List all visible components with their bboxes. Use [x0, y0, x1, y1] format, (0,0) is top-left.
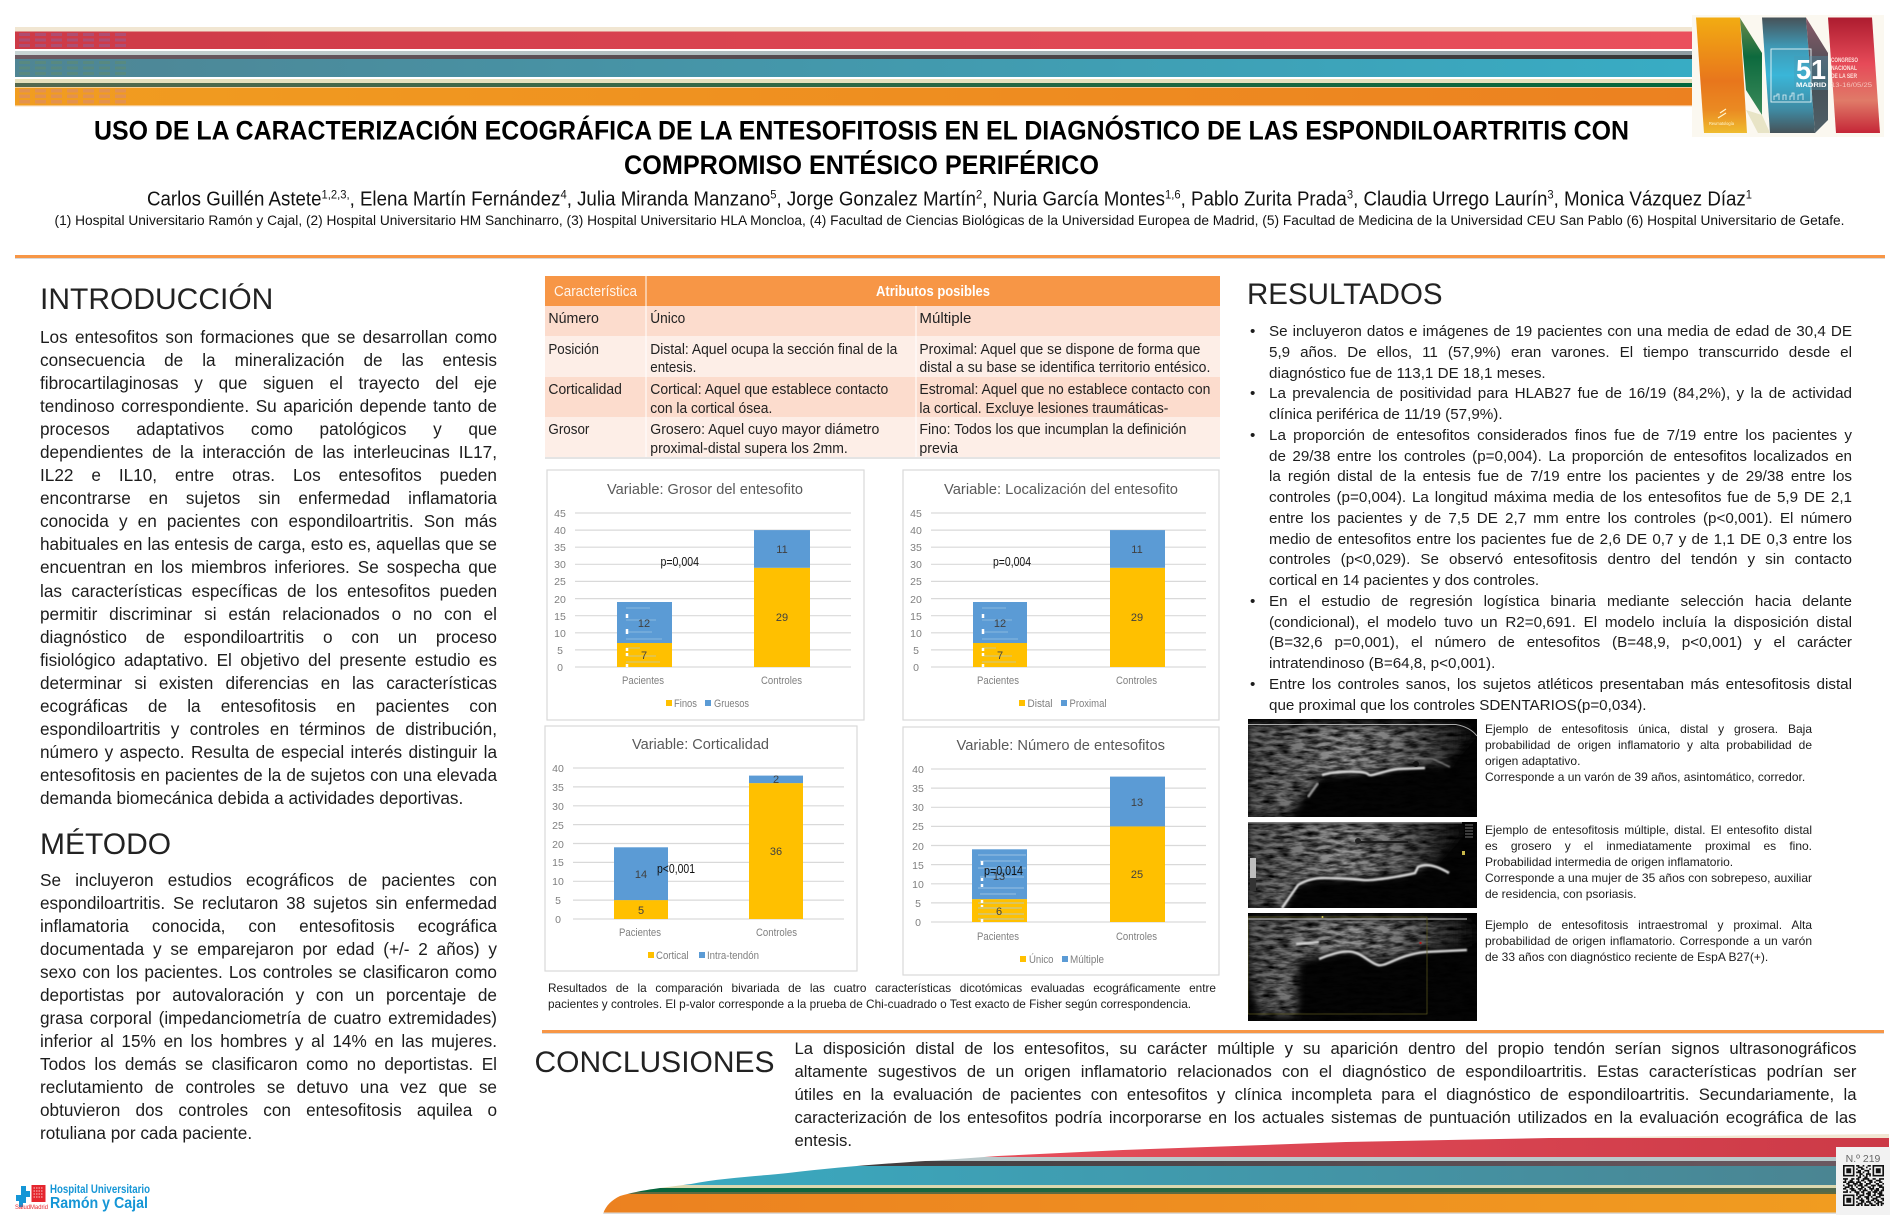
text: introducción: fibrocartilaginosas y que siguen el trayecto del eje	[40, 373, 497, 393]
table: características y atributos: Grosero: Aquel cuyo mayor diámetro	[650, 422, 879, 438]
chart: número de entesofitos: Único	[1029, 953, 1054, 966]
chart: corticalidad: 10	[552, 876, 564, 888]
chart: localización del entesofito: 45	[910, 508, 922, 520]
affiliations: (1) Hospital Universitario Ramón y Cajal, (2) Hospital Universitario HM Sanchinarro, (3) Hospital Universitario HLA Moncloa, (4) Facultad de Ciencias Biológicas de la Universidad Europea de Madrid, (5) Facultad de Medicina de la Universidad CEU San Pablo (6) Hospital Universitario de Getafe.	[54, 213, 1844, 228]
text: conclusiones: altamente sugestivos de un origen inflamatorio relacionados con el diagnóstico de espondiloartritis. Estas características podrían ser	[794, 1062, 1856, 1081]
authors: 5	[770, 188, 777, 202]
chart: localización del entesofito: 35	[910, 542, 922, 554]
chart: corticalidad: 20	[552, 839, 564, 851]
text: conclusiones: caracterización de los entesofitos podría incorporarse en los actuales sistemas de puntuación utilizados en la evaluación ecográfica de las	[794, 1108, 1856, 1127]
chart: localización del entesofito: Controles	[1116, 675, 1157, 687]
chart: corticalidad: 2	[773, 774, 779, 786]
chart: localización del entesofito: 25	[910, 576, 922, 588]
chart caption	[548, 981, 1216, 1011]
chart: localización del entesofito: 12	[994, 618, 1006, 630]
chart: localización del entesofito: 10	[910, 628, 922, 640]
chart: grosor del entesofito: 25	[554, 576, 566, 588]
text: conclusiones: La disposición distal de los entesofitos, su carácter múltiple y su aparición dentro del propio tendón serían signos ultrasonográficos	[794, 1038, 1856, 1058]
authors: Carlos Guillén Astete	[147, 188, 334, 210]
text: introducción: conocida y en pacientes con espondiloartritis. Son más	[40, 511, 497, 531]
text: introducción	[40, 327, 498, 808]
text: introducción: procesos adaptativos como patológicos y que	[40, 419, 497, 439]
chart: grosor del entesofito: 45	[554, 508, 566, 520]
authors: , Jorge Gonzalez Martín	[777, 188, 976, 210]
captions: ultrasound examples	[1485, 722, 1812, 964]
text: introducción: fisiológico adaptativo. El objetivo del presente estudio es	[40, 650, 497, 670]
chart: grosor del entesofito: Variable: Grosor del entesofito	[607, 481, 803, 498]
heading: introducción: INTRODUCCIÓN	[40, 283, 273, 316]
text: conclusiones: entesis.	[794, 1131, 852, 1150]
text: introducción: número y aspecto. Resulta de especial interés distinguir la	[40, 742, 497, 762]
chart: número de entesofitos: 25	[1131, 869, 1143, 881]
text: conclusiones	[794, 1038, 1857, 1150]
text: método: Todos los demás se clasificaron como no deportistas. El	[40, 1054, 497, 1074]
QR badge N.º 219	[1836, 1147, 1890, 1215]
text: resultados bullets: clínica periférica de 11/19 (57,9%).	[1269, 406, 1503, 423]
text: resultados bullets: la región distal de la entesis fue de 7/19 entre los pacientes y de 29/38 entre los	[1269, 468, 1852, 485]
chart: grosor del entesofito	[546, 470, 864, 720]
chart: número de entesofitos: 25	[912, 821, 924, 833]
chart: corticalidad: 0	[555, 914, 561, 926]
text: método: obtuvieron dos controles con entesofitosis aquilea o	[40, 1100, 497, 1120]
table: características y atributos: Número	[548, 311, 599, 327]
text: introducción: consecuencia de la mineralización de las entesis	[40, 350, 497, 370]
authors: , Monica Vázquez Díaz	[1554, 188, 1746, 210]
chart: localización del entesofito: Pacientes	[977, 675, 1019, 687]
chart: número de entesofitos: 13	[993, 871, 1005, 883]
chart: grosor del entesofito: 35	[554, 542, 566, 554]
authors: 4	[560, 188, 567, 202]
text: método: espondiloartritis. Se reclutaron 38 sujetos sin enfermedad	[40, 893, 497, 913]
title	[94, 116, 1629, 180]
chart: corticalidad: 40	[552, 763, 564, 775]
text: introducción: diagnóstico de espondiloartritis o con un proceso	[40, 627, 497, 647]
text: introducción: dependientes de la interacción de las interleucinas IL17,	[40, 442, 497, 462]
caption 1: Corresponde a un varón de 39 años, asintomático, corredor.	[1485, 770, 1805, 784]
table: características y atributos: Característica	[554, 284, 638, 300]
chart: número de entesofitos: Pacientes	[977, 931, 1019, 943]
logo: 51 Congreso Nacional de la SER	[1692, 15, 1884, 137]
chart: grosor del entesofito: 12	[638, 618, 650, 630]
chart: número de entesofitos: 20	[912, 841, 924, 853]
heading: conclusiones: CONCLUSIONES	[534, 1046, 775, 1078]
chart: localización del entesofito: p=0,004	[993, 555, 1031, 569]
chart: número de entesofitos: 5	[915, 898, 921, 910]
title: COMPROMISO ENTÉSICO PERIFÉRICO	[624, 150, 1099, 180]
top colour band	[15, 27, 1692, 107]
logo: 51 Congreso Nacional de la SER: 51	[1796, 54, 1826, 85]
table: características y atributos: Único	[650, 310, 685, 327]
panel: resultados: •	[1250, 593, 1255, 610]
chart: número de entesofitos: Múltiple	[1070, 954, 1104, 966]
caption 1	[1485, 722, 1812, 784]
text: resultados bullets: diagnóstico fue de 113,1 DE 18,1 meses.	[1269, 364, 1546, 382]
table: características y atributos: Grosor	[548, 422, 590, 438]
ultrasound image 3	[1248, 913, 1477, 1021]
chart: corticalidad: p<0,001	[657, 862, 695, 876]
logo: 51 Congreso Nacional de la SER: NACIONAL	[1831, 66, 1857, 72]
chart: número de entesofitos: p=0,014	[984, 864, 1023, 878]
text: introducción: encontrarse en sujetos sin enfermedad inflamatoria	[40, 488, 497, 508]
chart: localización del entesofito: 11	[1131, 544, 1143, 556]
chart: corticalidad: 5	[555, 895, 561, 907]
authors: 2	[976, 188, 983, 202]
text: resultados bullets: controles (p=0,004). La longitud máxima media de los entesofitos fue de 5,9 DE 2,1	[1269, 489, 1852, 506]
text: introducción: Los entesofitos son formaciones que se desarrollan como	[40, 327, 497, 347]
text: método: sexo con los pacientes. Los controles se clasificaron como	[40, 962, 497, 982]
table: características y atributos: la cortical. Excluye lesiones traumáticas-	[919, 401, 1169, 417]
text: resultados bullets: entre los pacientes y de 7,5 DE 2,7 mm entre los controles (p<0,001). El número	[1269, 510, 1852, 527]
text: introducción: permitir discriminar si están relacionados o no con el	[40, 604, 497, 624]
table: características y atributos	[545, 276, 1220, 458]
caption 2: de residencia, con psoriasis.	[1485, 887, 1636, 901]
caption 3: de 33 años con diagnóstico reciente de EspA B27(+).	[1485, 950, 1768, 964]
table: características y atributos: Corticalidad	[548, 382, 622, 398]
panel: conclusiones	[534, 1038, 1857, 1150]
logo: Hospital Universitario Ramón y Cajal: SaludMadrid	[15, 1205, 48, 1211]
text: resultados bullets: cortical en 14 pacientes y dos controles.	[1269, 572, 1539, 589]
chart: grosor del entesofito: Finos	[674, 698, 697, 710]
chart: grosor del entesofito: 0	[557, 662, 563, 674]
chart: localización del entesofito: 7	[997, 650, 1003, 662]
chart: grosor del entesofito: 29	[776, 612, 788, 624]
chart: grosor del entesofito: 15	[554, 611, 566, 623]
table: características y atributos: proximal-distal supera los 2mm.	[650, 441, 848, 457]
authors: , Claudia Urrego Laurín	[1353, 188, 1547, 210]
authors: , Elena Martín Fernández	[350, 188, 560, 210]
chart: grosor del entesofito: 40	[554, 525, 566, 537]
chart: corticalidad: 14	[635, 869, 647, 881]
text: introducción: tendinoso correspondiente. Su aparición depende tanto de	[40, 396, 497, 416]
text: método: rotuliana por cada paciente.	[40, 1123, 252, 1143]
authors	[147, 188, 1752, 210]
panel: resultados: •	[1250, 676, 1255, 693]
chart: número de entesofitos: 40	[912, 764, 924, 776]
text: introducción: espondiloartritis y controles en términos de distribución,	[40, 719, 497, 739]
text: resultados bullets: En el estudio de regresión logística binaria mediante selección hacia delante	[1269, 593, 1852, 610]
table: características y atributos: Cortical: Aquel que establece contacto	[650, 382, 888, 398]
chart: número de entesofitos: 0	[915, 917, 921, 929]
table: características y atributos: Distal: Aquel ocupa la sección final de la	[650, 342, 898, 358]
chart: localización del entesofito: 15	[910, 611, 922, 623]
text: resultados bullets: que proximal que los controles SDENTARIOS(p=0,034).	[1269, 696, 1646, 714]
logo: 51 Congreso Nacional de la SER: CONGRESO	[1831, 58, 1858, 64]
caption 3	[1485, 918, 1812, 964]
logo: 51 Congreso Nacional de la SER: DE LA SER	[1831, 74, 1858, 80]
authors: , Nuria García Montes	[982, 188, 1165, 210]
caption 3: Ejemplo de entesofitosis intraestromal y proximal. Alta	[1485, 918, 1812, 932]
chart: corticalidad: Intra-tendón	[707, 950, 759, 962]
chart: número de entesofitos: Controles	[1116, 931, 1157, 943]
text: introducción: encuentran en los miembros inferiores. Se sospecha que	[40, 557, 497, 577]
caption 1: origen adaptativo.	[1485, 754, 1580, 768]
chart: localización del entesofito: 30	[910, 559, 922, 571]
authors: , Julia Miranda Manzano	[567, 188, 770, 210]
table: características y atributos: Posición	[548, 342, 599, 358]
chart: localización del entesofito: 20	[910, 594, 922, 606]
text: conclusiones: útiles en la evaluación de pacientes con entesofitos y clínica incompleta para el diagnóstico de espondiloartritis. Secundariamente, la	[794, 1085, 1856, 1104]
chart: grosor del entesofito: 10	[554, 628, 566, 640]
QR badge N.º 219: N.º 219	[1846, 1153, 1881, 1165]
table: características y atributos: Atributos posibles	[876, 284, 990, 300]
chart caption: pacientes y controles. El p-valor corresponde a la prueba de Chi-cuadrado o Test exacto de Fisher según correspondencia.	[548, 997, 1191, 1011]
panel: resultados: •	[1250, 385, 1255, 402]
text: resultados bullets: (B=32,6 p=0,001), el número de entesofitos (B=48,9, p<0,001) y el carácter	[1269, 634, 1852, 651]
text: resultados bullets: de 29/38 entre los controles (p=0,004). La proporción de entesofitos localizados en	[1269, 448, 1852, 464]
text: introducción: ecográficas de la entesofitosis en pacientes con	[40, 696, 497, 716]
panel: introducción	[40, 283, 498, 808]
chart: número de entesofitos	[902, 726, 1220, 976]
chart: número de entesofitos: 15	[912, 860, 924, 872]
ultrasound image 1	[1248, 719, 1477, 817]
chart: número de entesofitos: 30	[912, 802, 924, 814]
authors: 3	[1347, 188, 1353, 202]
ultrasound image 2	[1248, 822, 1477, 908]
text: método: Se incluyeron estudios ecográficos de pacientes con	[40, 870, 497, 890]
chart: corticalidad: 36	[770, 846, 782, 858]
table: características y atributos: Múltiple	[919, 311, 971, 327]
text: introducción: demanda biomecánica debida a actividades deportivas.	[40, 788, 463, 808]
heading: método: MÉTODO	[40, 828, 171, 860]
table: características y atributos: Estromal: Aquel que no establece contacto con	[919, 382, 1210, 398]
text: método	[40, 870, 497, 1143]
text: resultados bullets: controles (p<0,029). Se observó entesofitosis dentro del tendón y sin contacto	[1269, 551, 1852, 568]
chart: localización del entesofito: 40	[910, 525, 922, 537]
text: resultados bullets: 5,9 años. De ellos, 11 (57,9%) eran varones. El tiempo transcurrido desde el	[1269, 344, 1852, 361]
chart: corticalidad: Controles	[756, 927, 797, 939]
text: método: deportistas por autovaloración y con un porcentaje de	[40, 985, 497, 1005]
chart: corticalidad: 25	[552, 820, 564, 832]
chart: grosor del entesofito: Gruesos	[714, 698, 749, 710]
text: resultados bullets: medio de entesofitos entre los pacientes fue de 2,6 DE 0,7 y de 1,1 DE 0,3 entre los	[1269, 530, 1852, 548]
text: resultados bullets: La prevalencia de positividad para HLAB27 fue de 16/19 (84,2%), y la de actividad	[1269, 385, 1852, 402]
chart: número de entesofitos: 13	[1131, 797, 1143, 809]
chart: localización del entesofito: 29	[1131, 612, 1143, 624]
logo: 51 Congreso Nacional de la SER: Reumatología	[1709, 121, 1734, 126]
panel: resultados: •	[1250, 427, 1255, 444]
chart: número de entesofitos: Variable: Número de entesofitos	[956, 737, 1165, 754]
caption 3: probabilidad de origen inflamatorio. Corresponde a un varón	[1485, 934, 1812, 948]
table: características y atributos: previa	[919, 441, 959, 457]
chart: grosor del entesofito: 20	[554, 594, 566, 606]
caption 2: Ejemplo de entesofitosis múltiple, distal. El entesofito distal	[1485, 823, 1812, 837]
caption 2: Corresponde a una mujer de 35 años con sobrepeso, auxiliar	[1485, 871, 1812, 885]
panel: método	[40, 828, 497, 1143]
chart: corticalidad	[544, 726, 858, 972]
chart: grosor del entesofito: 30	[554, 559, 566, 571]
text: introducción: las características específicas de los entesofitos pueden	[40, 581, 497, 601]
chart: corticalidad: Cortical	[656, 950, 689, 962]
chart: grosor del entesofito: Controles	[761, 675, 802, 687]
chart: localización del entesofito: Proximal	[1070, 698, 1106, 710]
text: resultados bullets: La proporción de entesofitos considerados finos fue de 7/19 entre los pacientes y	[1269, 427, 1852, 444]
table: características y atributos: Proximal: Aquel que se dispone de forma que	[919, 342, 1200, 358]
caption 1: Ejemplo de entesofitosis única, distal y grosera. Baja	[1485, 722, 1812, 736]
panel: resultados: •	[1250, 323, 1255, 340]
logo: Hospital Universitario Ramón y Cajal	[15, 1184, 150, 1212]
chart: corticalidad: Pacientes	[619, 927, 661, 939]
text: resultados bullets: Se incluyeron datos e imágenes de 19 pacientes con una media de edad de 30,4 DE	[1269, 323, 1852, 340]
chart: grosor del entesofito: 7	[641, 650, 647, 662]
authors: 3	[1547, 188, 1554, 202]
text: método: documentada y se emparejaron por edad (+/- 2 años) y	[40, 939, 497, 959]
logo: 51 Congreso Nacional de la SER: 13-16/05/25	[1831, 82, 1872, 89]
text: resultados bullets: intratendinoso (B=64,8, p<0,001).	[1269, 655, 1495, 672]
chart: localización del entesofito: Variable: Localización del entesofito	[944, 481, 1178, 498]
chart: número de entesofitos: 35	[912, 783, 924, 795]
chart: corticalidad: Variable: Corticalidad	[632, 736, 769, 753]
chart: corticalidad: 30	[552, 801, 564, 813]
text: resultados bullets: (condicional), el modelo tuvo un R2=0,691. El modelo incluía la disposición distal	[1269, 614, 1852, 630]
text: método: grasa corporal (impedanciometría de cuatro extremidades)	[40, 1008, 497, 1028]
text: método: reclutamiento de controles se detuvo una vez que se	[40, 1077, 497, 1097]
chart: localización del entesofito: 5	[913, 645, 919, 657]
chart: corticalidad: 5	[638, 905, 644, 917]
authors: 1,2,3,	[322, 188, 350, 202]
authors: 1	[1746, 188, 1752, 202]
text: resultados bullets: Entre los controles sanos, los sujetos atléticos presentaban más entesofitosis distal	[1269, 676, 1852, 693]
chart: número de entesofitos: 10	[912, 879, 924, 891]
chart: corticalidad: 15	[552, 857, 564, 869]
chart: localización del entesofito: Distal	[1028, 698, 1052, 710]
authors: 1,6	[1165, 188, 1181, 202]
bottom colour band	[603, 1134, 1889, 1214]
text: introducción: determinar si existen diferencias en las características	[40, 673, 497, 693]
caption 2: es grosero y el inmediatamente proximal es fino.	[1485, 839, 1812, 853]
chart: número de entesofitos: 6	[996, 906, 1002, 918]
chart: grosor del entesofito: Pacientes	[622, 675, 664, 687]
chart: localización del entesofito: 0	[913, 662, 919, 674]
text: introducción: entesofitosis en pacientes de la de sujetos con una elevada	[40, 765, 497, 785]
caption 2	[1485, 823, 1812, 901]
chart: grosor del entesofito: 11	[776, 544, 788, 556]
text: método: inferior al 15% en los hombres y al 14% en las mujeres.	[40, 1031, 497, 1051]
chart caption: Resultados de la comparación bivariada de las cuatro características dicotómicas evaluadas ecográficamente entre	[548, 981, 1216, 995]
title: USO DE LA CARACTERIZACIÓN ECOGRÁFICA DE LA ENTESOFITOSIS EN EL DIAGNÓSTICO DE LAS ESPONDILOARTRITIS CON	[94, 116, 1629, 146]
text: método: inflamatoria conocida, con entesofitosis ecográfica	[40, 916, 497, 936]
caption 2: Probabilidad intermedia de origen inflamatorio.	[1485, 855, 1733, 869]
table: características y atributos: con la cortical ósea.	[650, 401, 772, 417]
table: características y atributos: entesis.	[650, 360, 696, 376]
caption 1: probabilidad de origen inflamatorio y alta probabilidad de	[1485, 738, 1812, 752]
text: introducción: habituales en las entesis de carga, esto es, aquellas que se	[40, 534, 497, 554]
logo: 51 Congreso Nacional de la SER: MADRID	[1796, 82, 1827, 89]
chart: grosor del entesofito: 5	[557, 645, 563, 657]
heading: resultados: RESULTADOS	[1247, 278, 1443, 311]
chart: grosor del entesofito: p=0,004	[660, 555, 699, 569]
text: resultados bullets	[1250, 323, 1852, 714]
authors: , Pablo Zurita Prada	[1181, 188, 1348, 210]
panel: resultados	[1247, 278, 1852, 714]
table: características y atributos: Fino: Todos los que incumplan la definición	[919, 422, 1186, 438]
table: características y atributos: distal a su base se identifica territorio entésico.	[919, 360, 1210, 376]
chart: localización del entesofito	[902, 470, 1220, 720]
text: introducción: IL22 e IL10, entre otras. Los entesofitos pueden	[40, 465, 497, 485]
chart: corticalidad: 35	[552, 782, 564, 794]
